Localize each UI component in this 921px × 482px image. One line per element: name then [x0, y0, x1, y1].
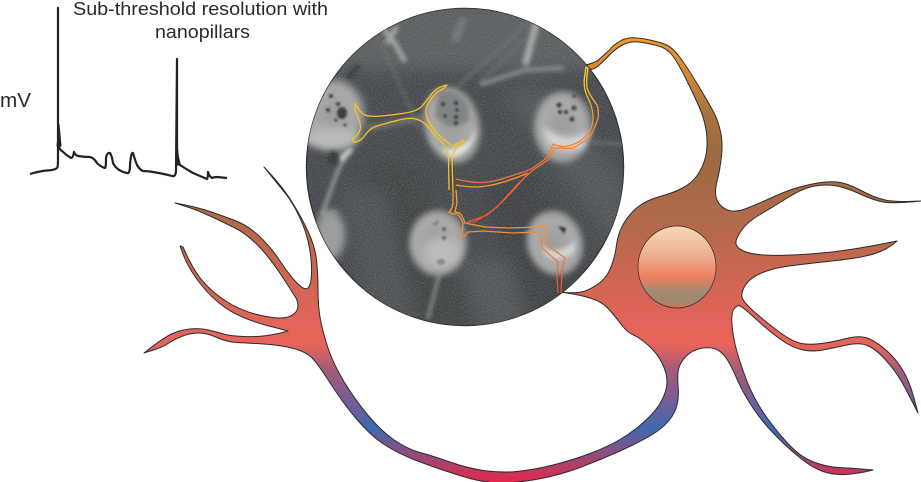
y axis label: mV: [0, 90, 32, 112]
trace: central process right edge to lower right: [455, 190, 565, 293]
trace: red diagonal branch: [466, 173, 528, 223]
pillar top left: [302, 79, 365, 165]
traced neurite outline: [352, 67, 598, 293]
dark and light background bands: [336, 8, 623, 326]
voltage trace: [30, 8, 227, 179]
pillar bottom right: [523, 207, 587, 279]
micrograph: nanopillar circle: [300, 0, 630, 330]
trace: central process left edge to lower right: [449, 190, 558, 293]
neuron: [144, 38, 921, 482]
pillar bottom left: [409, 210, 467, 276]
pillar top right: [534, 91, 592, 163]
heading: nanopillars: [155, 21, 250, 42]
bright process streaks: [322, 15, 622, 318]
trace: upper right process: [456, 67, 598, 223]
trace: lower return to branch: [456, 173, 528, 187]
image grain: [305, 7, 625, 327]
heading: [73, 0, 328, 42]
nucleus: [638, 226, 716, 308]
pillar top centre: [420, 84, 484, 167]
pillar far left partial: [315, 210, 345, 260]
trace: left branch to centre: [352, 85, 465, 190]
